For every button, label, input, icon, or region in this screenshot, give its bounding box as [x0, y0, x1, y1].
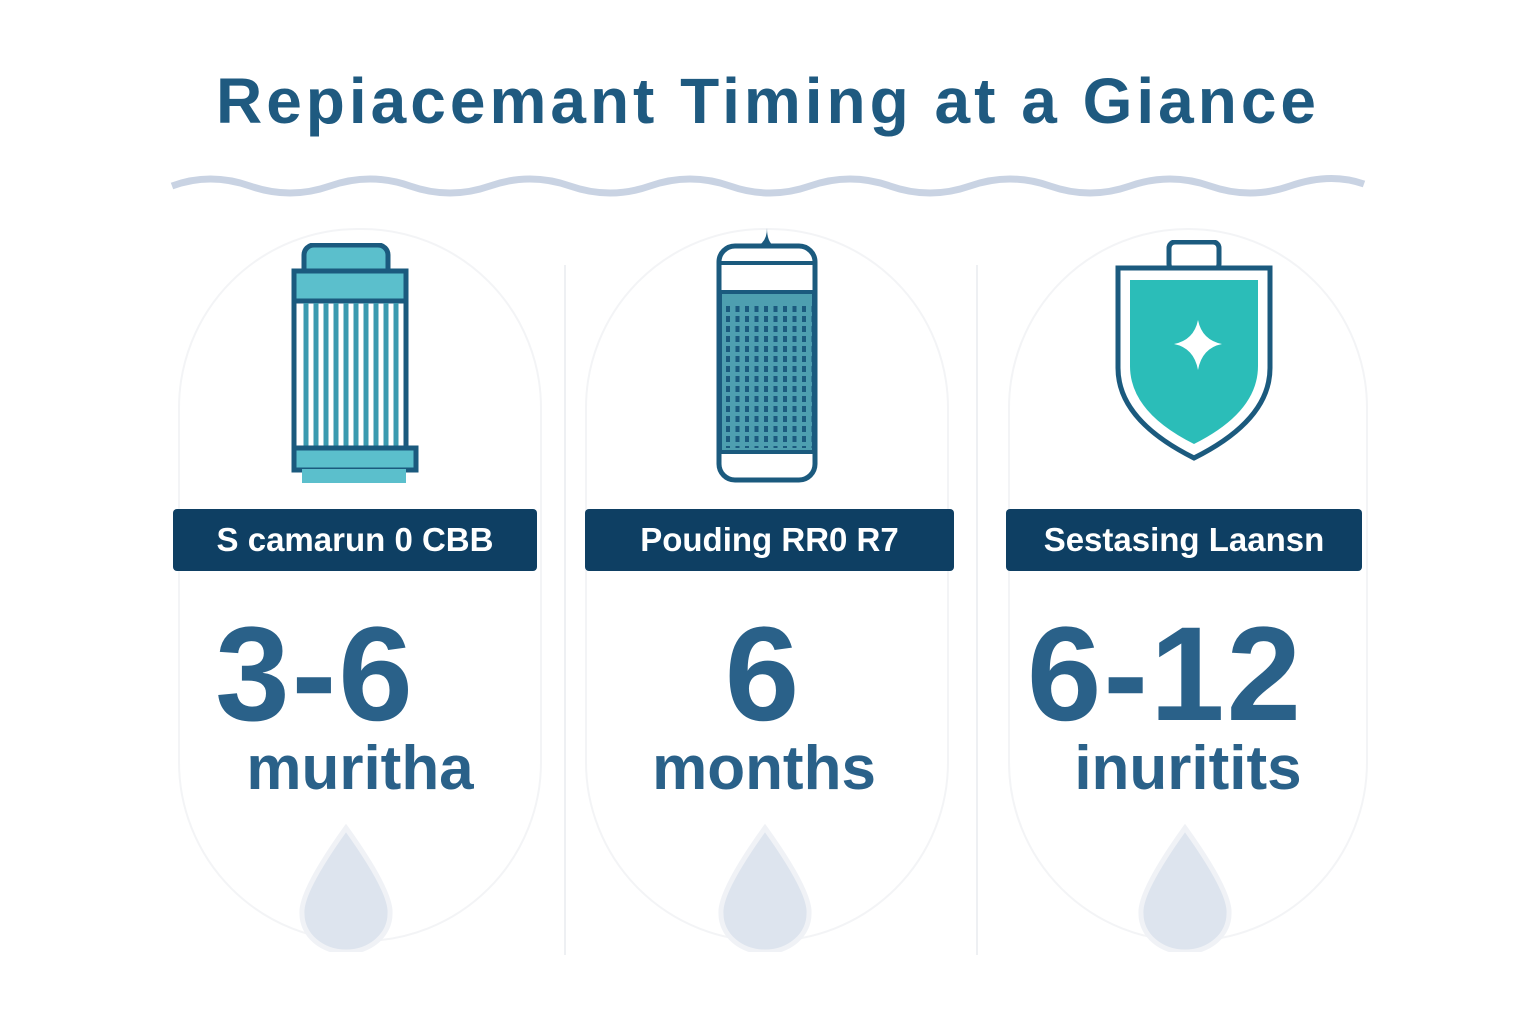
title: Repiacemant Timing at a Giance [216, 65, 1320, 137]
icon: drops [300, 824, 1232, 952]
number: 6-12: 6-12 [1027, 600, 1303, 749]
unit: inuritits [1074, 734, 1302, 803]
icon: carbon cylinder [716, 228, 818, 482]
label: carbon [585, 509, 954, 571]
panel: sediment [178, 228, 542, 942]
label: sediment [173, 509, 537, 571]
label: carbon: Pouding RR0 R7 [640, 521, 899, 558]
label: membrane: Sestasing Laansn [1044, 521, 1324, 558]
panel: carbon [585, 228, 949, 942]
number: 3-6: 3-6 [215, 600, 415, 749]
unit: months [652, 734, 876, 803]
label: sediment: S camarun 0 CBB [217, 521, 493, 558]
wave divider [170, 175, 1365, 196]
unit: muritha [246, 734, 474, 803]
number: 6: 6 [725, 600, 799, 749]
icon: pleated filter [292, 243, 418, 483]
label: membrane [1006, 509, 1362, 571]
icon: shield [1116, 240, 1272, 461]
panel: membrane [1008, 228, 1368, 942]
